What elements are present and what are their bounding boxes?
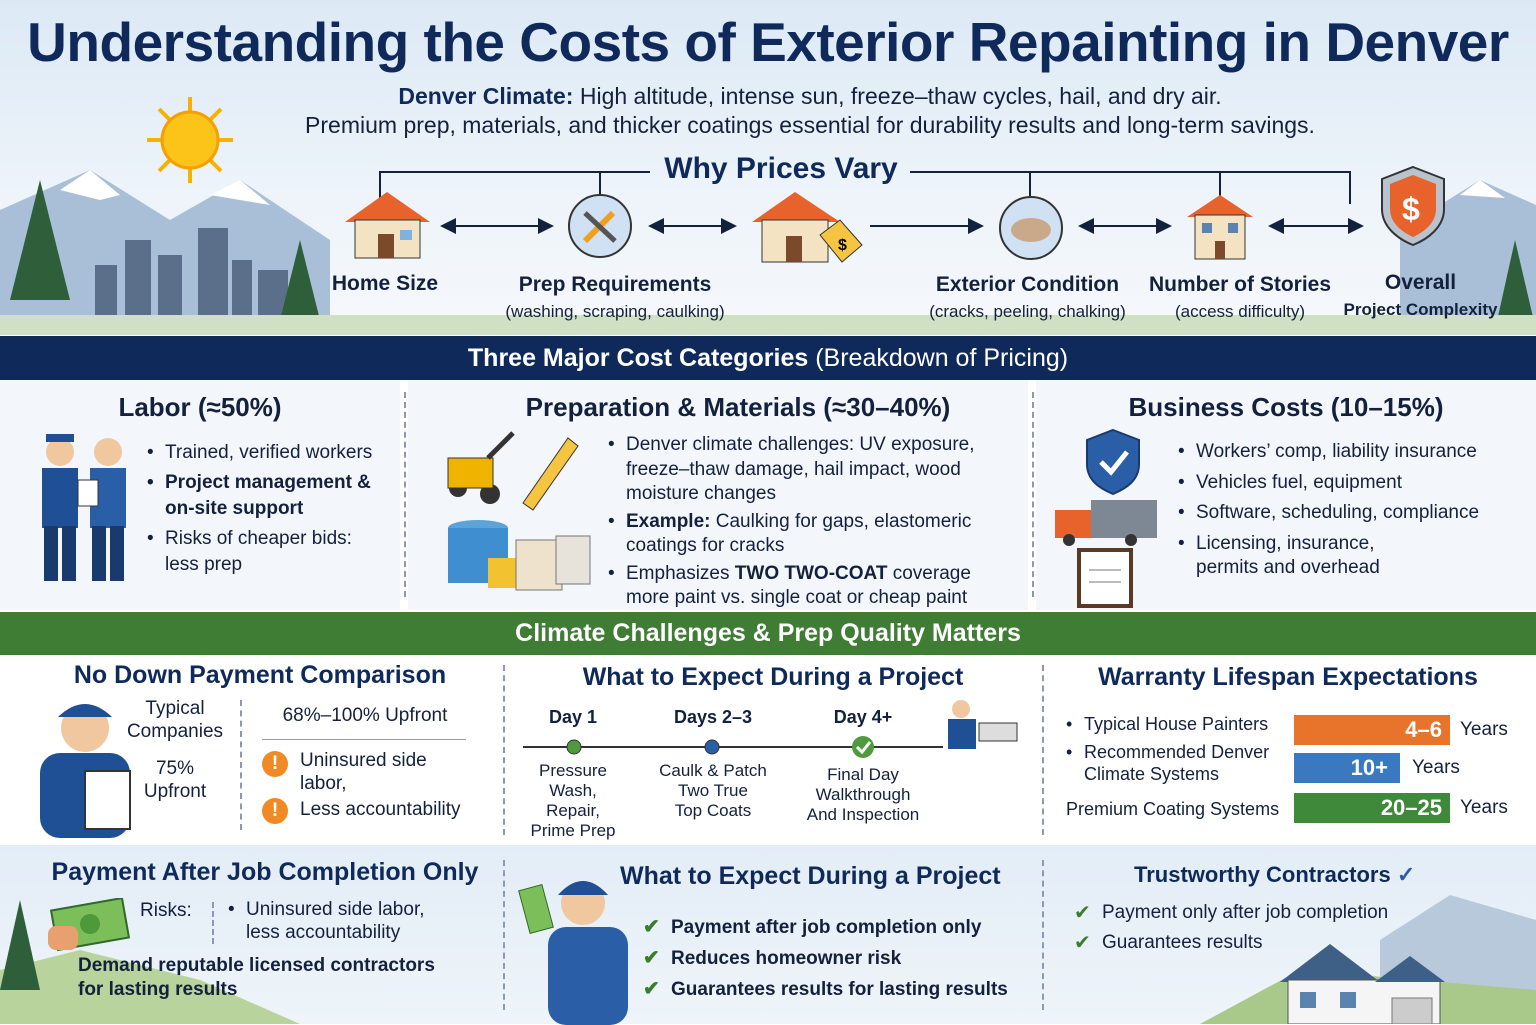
panel: trustworthy contractors: Trustworthy Contractors ✓ [1134,862,1415,887]
panel: what to expect timeline: Pressure [539,761,607,780]
panel: what to expect timeline: Final Day [827,765,899,784]
bar: three major cost categories: Three Major Cost Categories (Breakdown of Pricing) [468,344,1068,372]
panel: what to expect timeline: Top Coats [675,801,751,820]
panel: what to expect timeline: Walkthrough [816,785,910,804]
bar: three major cost categories [0,336,1536,380]
warranty bars: 10+ [1351,755,1388,780]
icon row: (cracks, peeling, chalking) [929,302,1126,321]
icon row: (access difficulty) [1175,302,1305,321]
panel: trustworthy contractors: Guarantees results [1102,932,1263,953]
why prices vary heading: Why Prices Vary [664,152,898,185]
panel: warranty lifespan: Typical House Painters [1084,714,1268,734]
icon: house [1280,944,1445,1024]
warranty bars: 4–6 [1405,717,1442,742]
icon: home size [345,192,430,258]
panel: what to expect payment: What to Expect During a Project [620,862,1001,890]
labels: Home Size [332,272,438,295]
panel: what to expect timeline: What to Expect During a Project [583,663,963,691]
panel: what to expect timeline: Wash, [549,781,597,800]
panel: labor: less prep [165,554,242,575]
panel: no down payment comparison: 75% [156,758,194,779]
icon row [332,166,1498,321]
icon row: Number of Stories [1149,273,1331,296]
climate text: Premium prep, materials, and thicker coatings essential for durability results and long-term savings. [305,112,1315,138]
panel: what to expect payment: Reduces homeowner risk [671,948,901,969]
icon: house with price tag [752,192,863,263]
panel: warranty lifespan: Warranty Lifespan Expectations [1098,663,1478,691]
panel: payment after completion: Risks: [140,900,192,921]
warnings [262,750,461,824]
icon: worker painting [948,700,1018,749]
panel: payment after completion: less accountability [246,922,400,943]
icon: house with price tag: $ [838,237,847,254]
panel: no down payment comparison: Typical [145,698,205,719]
panel: what to expect timeline: Day 1 [549,707,597,727]
warranty bars: Years [1412,757,1460,778]
icon: stories [1187,195,1253,260]
icon: sun [147,97,233,183]
panel: what to expect payment: Guarantees results for lasting results [671,979,1008,1000]
sky background [0,0,1536,335]
panel: trustworthy contractors [1076,862,1445,1024]
warranty bars [1294,715,1508,823]
warnings: ! [272,800,278,821]
panel: payment after completion: Demand reputable licensed contractors [78,955,435,976]
warnings: ! [272,753,278,774]
climate text [305,83,1315,138]
icon: shield dollar [1381,166,1445,246]
panel: no down payment comparison [0,655,500,843]
timeline [523,736,943,758]
panel: what to expect timeline [523,663,1018,840]
panel: business costs: Business Costs (10–15%) [1128,392,1444,422]
panel: warranty lifespan: Premium Coating Systems [1066,799,1279,819]
warnings: Uninsured side labor, [300,750,427,794]
panel: what to expect timeline: Two True [678,781,748,800]
icon row: Exterior Condition [936,273,1119,296]
panel: business costs: Software, scheduling, compliance [1196,502,1479,523]
warranty bars: 20–25 [1381,795,1442,820]
panel: what to expect timeline: Days 2–3 [674,707,752,727]
panel: business costs: Licensing, insurance, [1196,532,1374,554]
warranty bars: Years [1460,719,1508,740]
panel: what to expect timeline: And Inspection [807,805,919,824]
icon: pressure washer, caulk, paint cans [448,431,590,590]
icon: exterior condition [999,196,1063,260]
panel: labor: Labor (≈50%) [118,392,282,422]
mountains and city [0,170,1536,335]
panel: labor: Risks of cheaper bids: [165,528,352,549]
panel: no down payment comparison: Upfront [144,781,206,802]
panel: no down payment comparison: Companies [127,721,223,742]
panel: preparation & materials: Emphasizes TWO TWO-COAT coverage more paint vs. single coat or cheap paint [626,562,971,608]
icon: shield, truck, clipboard [1055,428,1157,608]
icon: shield dollar: $ [1402,191,1420,227]
panel: payment after completion: Payment After Job Completion Only [52,858,478,886]
warnings: Less accountability [300,799,461,820]
panel: warranty lifespan [1066,663,1508,823]
icon: prep tools [568,194,632,258]
panel: business costs: permits and overhead [1196,557,1380,578]
panel: business costs: Vehicles fuel, equipment [1196,472,1402,492]
panel: what to expect payment [518,862,1008,1025]
panel: payment after completion: for lasting results [78,979,237,1000]
bar: climate challenges [0,612,1536,655]
panel: preparation & materials: Denver climate challenges: UV exposure, freeze–thaw damage, hail impact, wood moisture changes [626,434,975,504]
panel: preparation & materials [408,380,1028,610]
panel: preparation & materials: Preparation & Materials (≈30–40%) [526,392,950,422]
panel: what to expect payment: Payment after job completion only [671,917,981,938]
panel: no down payment comparison: No Down Payment Comparison [74,661,446,689]
warranty bars: Years [1460,797,1508,818]
panel: what to expect timeline: Prime Prep [530,821,616,840]
panel: trustworthy contractors: Payment only after job completion [1102,902,1388,923]
panel: business costs [1036,380,1536,610]
bottom background [0,845,1536,1024]
panel: warranty lifespan: Recommended Denver Climate Systems [1084,742,1269,784]
icon row: Overall [1385,271,1456,294]
panel: what to expect timeline: Day 4+ [834,707,892,727]
icon: painter with money [518,881,628,1025]
panel: payment after completion: Uninsured side labor, [246,899,424,920]
panel: what to expect timeline: Repair, [546,801,600,820]
panel: what to expect timeline: Caulk & Patch [659,761,767,780]
icon: money [48,898,130,952]
icon: workers [42,434,126,581]
panel: labor: Project management & on-site support [165,472,371,519]
climate text: Denver Climate: High altitude, intense sun, freeze–thaw cycles, hail, and dry air. [398,83,1222,109]
icon: painter with clipboard [40,704,131,838]
bar: climate challenges: Climate Challenges & Prep Quality Matters [515,619,1021,647]
icon row: Project Complexity [1344,300,1498,319]
panel: labor [0,380,400,610]
title: Understanding the Costs of Exterior Repainting in Denver [27,11,1509,73]
panel: no down payment comparison: 68%–100% Upfront [283,705,447,726]
icon row: Prep Requirements [519,273,711,296]
icon row: (washing, scraping, caulking) [505,302,725,321]
panel: preparation & materials: Example: Caulking for gaps, elastomeric coatings for cracks [626,510,971,556]
connector lines and arrows [379,171,1364,234]
panel: labor: Trained, verified workers [165,442,372,463]
panel: payment after completion [48,858,478,1000]
panel: business costs: Workers’ comp, liability insurance [1196,441,1477,462]
